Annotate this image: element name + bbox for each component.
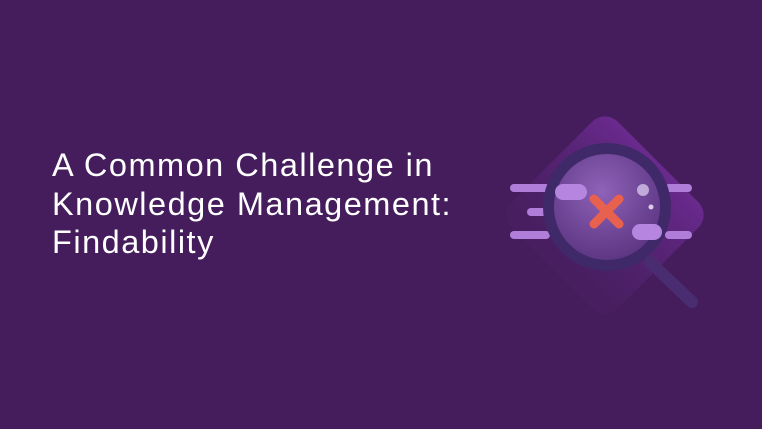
speed lines: [510, 184, 692, 239]
title: A Common Challenge in: [52, 147, 434, 183]
title: [52, 147, 452, 260]
handle: [650, 262, 692, 302]
lens rim: [543, 143, 671, 271]
lens glass: [554, 154, 660, 260]
diamond background: [499, 109, 711, 321]
icon: red x: [594, 199, 619, 224]
title: Knowledge Management:: [52, 186, 452, 222]
title: Findability: [52, 224, 215, 260]
